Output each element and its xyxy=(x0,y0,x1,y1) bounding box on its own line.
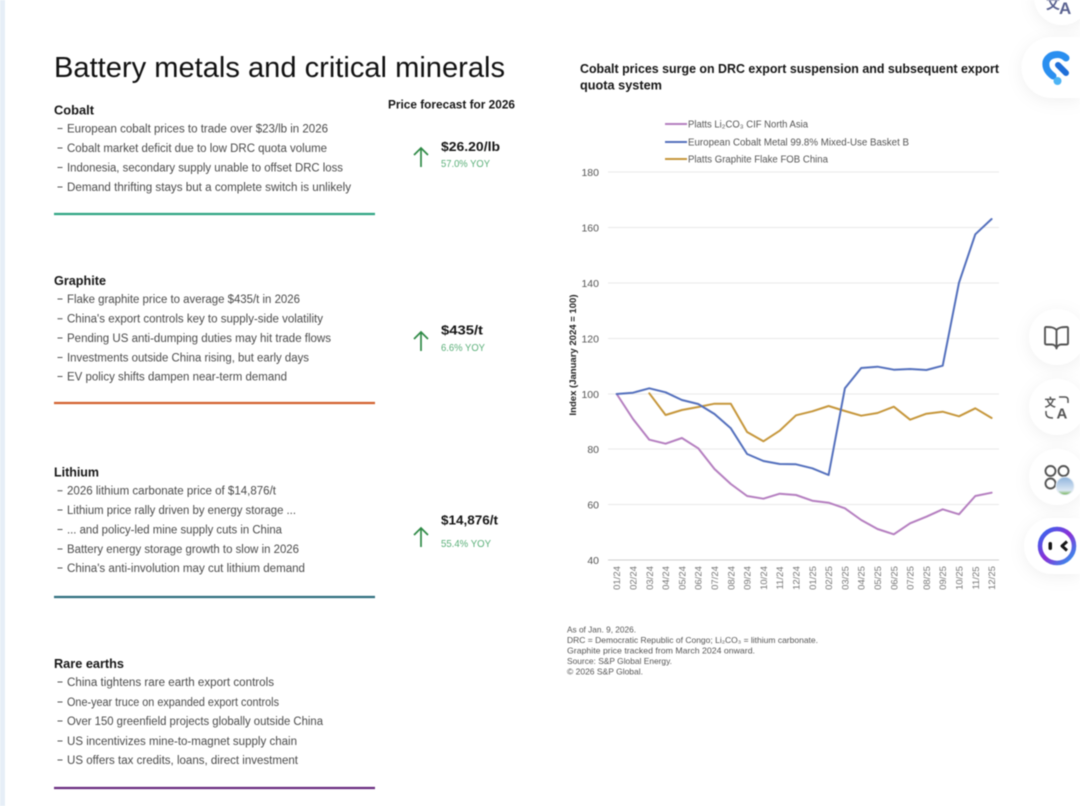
cobalt bullets xyxy=(58,124,351,194)
panel: rare earths xyxy=(54,656,375,788)
graphite bullets: EV policy shifts dampen near-term demand xyxy=(67,372,287,384)
y axis labels: 160 xyxy=(581,222,599,234)
chart legend: European Cobalt Metal 99.8% Mixed-Use Basket B xyxy=(688,138,909,148)
graphite rule xyxy=(54,402,375,404)
cobalt heading: Cobalt xyxy=(54,102,95,118)
chart legend xyxy=(665,120,909,166)
chart footnotes: DRC = Democratic Republic of Congo; Li₂CO₃ = lithium carbonate. xyxy=(567,635,818,645)
rare earths bullets: US offers tax credits, loans, direct investment xyxy=(67,755,299,767)
lithium bullets xyxy=(58,486,305,575)
panel: graphite xyxy=(54,273,485,403)
x axis labels: 05/24 xyxy=(677,566,688,590)
icon: blue assistant pill xyxy=(1022,37,1080,98)
graphite bullets: Pending US anti-dumping duties may hit trade flows xyxy=(67,333,331,345)
icon: robot assistant pill xyxy=(1024,518,1080,574)
chart title: Cobalt prices surge on DRC export suspension and subsequent export xyxy=(580,62,1000,76)
cobalt up arrow xyxy=(414,148,428,167)
lithium bullets: 2026 lithium carbonate price of $14,876/t xyxy=(67,486,277,498)
lithium bullets: Lithium price rally driven by energy storage ... xyxy=(67,505,296,517)
cobalt rule xyxy=(54,213,375,215)
series: lithium carbonate xyxy=(617,394,992,534)
y axis labels: 100 xyxy=(581,389,599,401)
x axis labels: 06/25 xyxy=(889,566,900,590)
y axis title: Index (January 2024 = 100) xyxy=(568,294,579,416)
x axis labels: 04/24 xyxy=(661,566,672,590)
rare earths bullets: One-year truce on expanded export controls xyxy=(67,697,279,709)
graphite up arrow xyxy=(414,332,428,351)
rare earths bullets: US incentivizes mine-to-magnet supply chain xyxy=(67,736,297,748)
forecast column heading: Price forecast for 2026 xyxy=(388,98,515,112)
y axis labels: 40 xyxy=(587,555,599,567)
rare earths bullets xyxy=(58,677,324,767)
chart title: quota system xyxy=(580,78,662,92)
icon: translate button xyxy=(1029,379,1080,435)
lithium bullets: Battery energy storage growth to slow in 2026 xyxy=(67,544,299,556)
x axis labels: 10/25 xyxy=(954,566,966,590)
cobalt bullets: Indonesia, secondary supply unable to offset DRC loss xyxy=(67,162,343,174)
x axis labels: 09/24 xyxy=(743,566,754,590)
cobalt bullets: Cobalt market deficit due to low DRC quota volume xyxy=(67,143,327,155)
cobalt bullets: European cobalt prices to trade over $23/lb in 2026 xyxy=(67,124,328,136)
rare earths rule xyxy=(54,787,375,789)
icon: book button xyxy=(1029,309,1080,365)
y axis labels: 180 xyxy=(581,167,599,179)
lithium yoy: 55.4% YOY xyxy=(441,538,491,550)
icon: translate button (top, cropped) xyxy=(1034,0,1080,25)
left edge strip xyxy=(0,0,5,806)
x axis labels: 03/25 xyxy=(840,566,851,590)
x axis labels: 01/24 xyxy=(612,566,623,590)
x axis labels: 08/24 xyxy=(726,566,737,590)
x axis labels: 12/24 xyxy=(792,566,802,590)
cobalt yoy: 57.0% YOY xyxy=(441,158,490,170)
x axis labels: 07/24 xyxy=(710,566,721,590)
rare earths heading: Rare earths xyxy=(54,656,124,671)
chart footnotes: © 2026 S&P Global. xyxy=(567,666,643,676)
x axis labels xyxy=(612,566,998,590)
x axis labels: 11/24 xyxy=(775,566,786,590)
x axis labels: 07/25 xyxy=(906,566,917,590)
x axis labels: 04/25 xyxy=(857,566,868,590)
y axis labels: 120 xyxy=(581,334,599,346)
chart footnotes xyxy=(567,624,818,676)
graphite heading: Graphite xyxy=(54,273,106,288)
rare earths bullets: Over 150 greenfield projects globally outside China xyxy=(67,716,324,728)
series: graphite flake xyxy=(649,393,992,441)
graphite yoy: 6.6% YOY xyxy=(441,342,485,354)
x axis labels: 10/24 xyxy=(759,566,770,590)
x axis labels: 08/25 xyxy=(922,566,933,590)
lithium bullets: ... and policy-led mine supply cuts in China xyxy=(67,524,283,536)
x axis labels: 03/24 xyxy=(645,566,656,590)
x axis labels: 12/25 xyxy=(987,566,998,590)
panel: cobalt xyxy=(54,102,500,214)
graphite price: $435/t xyxy=(441,322,484,338)
chart footnotes: Source: S&P Global Energy. xyxy=(567,656,672,666)
chart footnotes: As of Jan. 9, 2026. xyxy=(567,624,636,634)
chart title xyxy=(580,62,1000,92)
lithium up arrow xyxy=(414,528,428,547)
lithium bullets: China's anti-involution may cut lithium demand xyxy=(67,563,305,575)
y axis labels: 140 xyxy=(581,278,599,290)
y axis labels: 80 xyxy=(587,444,599,456)
chart legend: Platts Li₂CO₃ CIF North Asia xyxy=(688,120,808,130)
graphite bullets: Investments outside China rising, but early days xyxy=(67,352,309,364)
lithium rule xyxy=(54,596,375,598)
chart legend: Platts Graphite Flake FOB China xyxy=(688,154,828,166)
rare earths bullets: China tightens rare earth export controls xyxy=(67,677,274,689)
x axis labels: 01/25 xyxy=(808,566,819,590)
graphite bullets: China's export controls key to supply-side volatility xyxy=(67,314,323,326)
icon: translate button: A xyxy=(1056,406,1068,422)
chart footnotes: Graphite price tracked from March 2024 onward. xyxy=(567,646,755,656)
line chart xyxy=(568,167,999,590)
cobalt bullets: Demand thrifting stays but a complete switch is unlikely xyxy=(67,182,351,194)
x axis labels: 02/25 xyxy=(824,566,835,590)
icon: translate button: 文 xyxy=(1044,396,1056,410)
x axis labels: 09/25 xyxy=(938,566,949,590)
y axis labels xyxy=(581,167,599,567)
graphite bullets xyxy=(58,294,331,384)
lithium heading: Lithium xyxy=(54,464,99,480)
graphite bullets: Flake graphite price to average $435/t in 2026 xyxy=(67,294,300,306)
series: european cobalt xyxy=(617,219,992,475)
x axis labels: 06/24 xyxy=(694,566,705,590)
x axis labels: 11/25 xyxy=(971,566,982,590)
title: Battery metals and critical minerals xyxy=(54,52,505,84)
x axis labels: 05/25 xyxy=(873,566,884,590)
panel: lithium xyxy=(54,464,499,597)
lithium price: $14,876/t xyxy=(441,512,499,528)
x axis labels: 02/24 xyxy=(628,566,640,590)
y axis labels: 60 xyxy=(587,500,599,512)
cobalt price: $26.20/lb xyxy=(441,139,500,154)
icon: apps button xyxy=(1029,449,1080,505)
